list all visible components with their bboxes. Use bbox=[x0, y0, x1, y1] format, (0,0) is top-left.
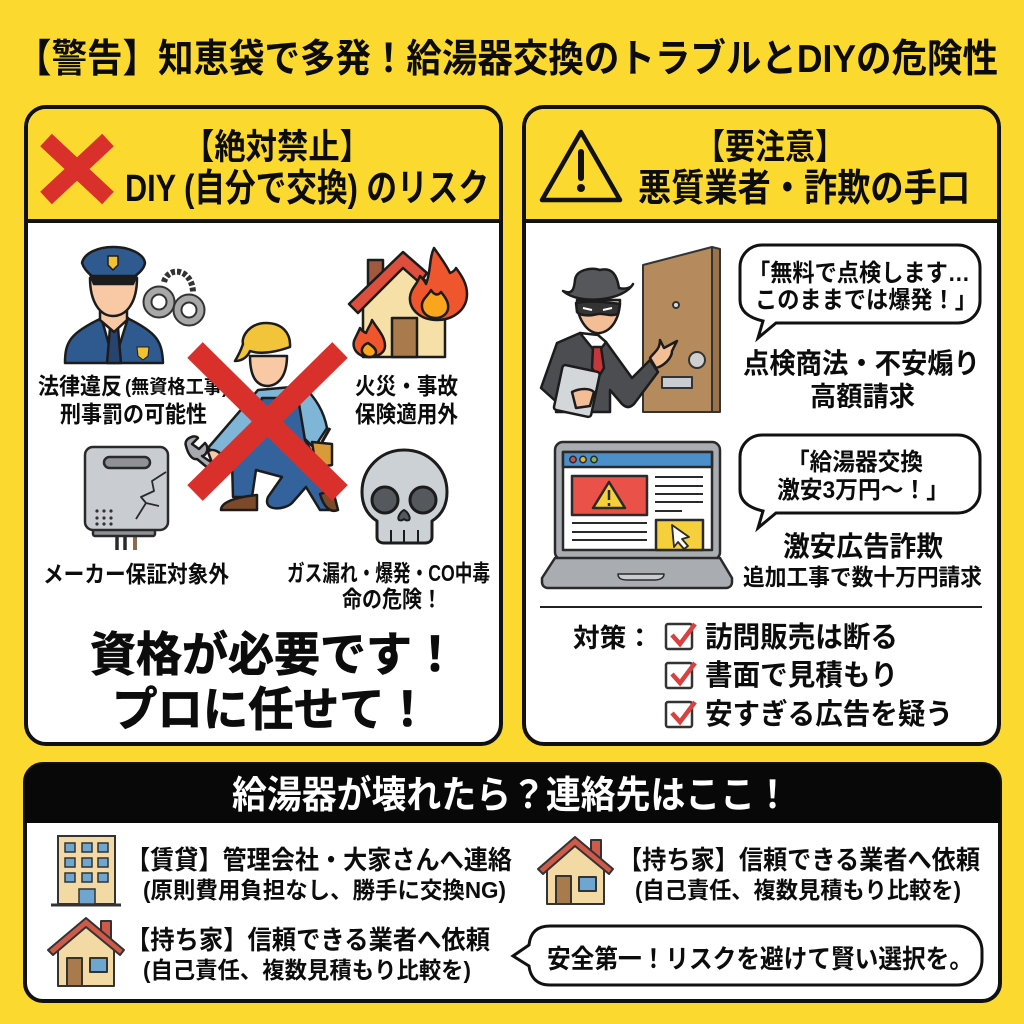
icon: cracked water heater bbox=[85, 447, 168, 550]
label: countermeasures: 対策： bbox=[573, 623, 653, 653]
text: renters: 【賃貸】管理会社・大家さんへ連絡 bbox=[126, 845, 512, 875]
icon: handcuffs bbox=[148, 272, 200, 322]
label: inspection scam bbox=[743, 348, 980, 412]
panel: DIY risks bbox=[26, 107, 501, 744]
label: gas leak danger: ガス漏れ・爆発・CO中毒 bbox=[287, 560, 490, 586]
callout: certification needed: 資格が必要です！ bbox=[90, 628, 458, 681]
label: no warranty: メーカー保証対象外 bbox=[43, 561, 229, 587]
text: homeowners left: (自己責任、複数見積もり比較を) bbox=[143, 957, 471, 983]
label: gas leak danger bbox=[287, 560, 490, 612]
speech bubble: cheap ad: 「給湯器交換 bbox=[787, 449, 923, 476]
checklist: 訪問販売は断る bbox=[705, 621, 898, 654]
label: fire and accidents: 保険適用外 bbox=[355, 401, 458, 427]
speech bubble: safety first bbox=[513, 926, 982, 985]
text: homeowners right: (自己責任、複数見積もり比較を) bbox=[635, 877, 961, 903]
icon: burning house bbox=[349, 248, 467, 357]
icon: DIY worker bbox=[186, 323, 338, 511]
icon: large red X over worker bbox=[195, 350, 340, 493]
label: legal violation bbox=[38, 373, 228, 427]
heading: caution: 【要注意】 bbox=[695, 128, 845, 167]
label: ad scam bbox=[743, 531, 982, 590]
heading: absolute prohibition: 【絶対禁止】 bbox=[183, 128, 371, 167]
panel: contacts bbox=[25, 764, 1000, 1001]
label: gas leak danger: 命の危険！ bbox=[342, 586, 442, 612]
icon: apartment building bbox=[51, 836, 121, 905]
label: legal violation: 法律違反 bbox=[38, 373, 122, 399]
text: homeowners left: 【持ち家】信頼できる業者へ依頼 bbox=[126, 925, 490, 955]
speech bubble: free inspection: 「無料で点検します… bbox=[748, 260, 970, 287]
icon: laptop ad bbox=[542, 442, 732, 588]
label: ad scam: 激安広告詐欺 bbox=[783, 531, 943, 562]
icon: police officer bbox=[65, 247, 163, 363]
text: renters: (原則費用負担なし、勝手に交換NG) bbox=[143, 877, 506, 903]
text: homeowners left bbox=[126, 925, 490, 983]
icon: house right bbox=[538, 837, 613, 904]
icon: house left bbox=[48, 918, 124, 986]
callout: certification needed bbox=[90, 628, 458, 736]
label: legal violation: 刑事罰の可能性 bbox=[60, 401, 207, 427]
checklist bbox=[666, 621, 953, 731]
icon: door bbox=[643, 247, 720, 412]
checklist: 安すぎる広告を疑う bbox=[705, 698, 953, 731]
icon: skull bbox=[362, 450, 447, 543]
speech bubble: cheap ad bbox=[740, 435, 980, 528]
label: fire and accidents bbox=[355, 373, 458, 427]
label: inspection scam: 点検商法・不安煽り bbox=[743, 348, 980, 379]
panel: scams bbox=[524, 107, 999, 744]
label: ad scam: 追加工事で数十万円請求 bbox=[743, 564, 982, 590]
icon: warning triangle bbox=[542, 132, 620, 200]
text: renters bbox=[126, 845, 512, 903]
label: legal violation: (無資格工事) bbox=[125, 376, 228, 398]
checklist: 書面で見積もり bbox=[705, 659, 898, 692]
speech bubble: cheap ad: 激安3万円～！」 bbox=[777, 477, 949, 504]
label: inspection scam: 高額請求 bbox=[810, 382, 915, 412]
speech bubble: free inspection: このままでは爆発！」 bbox=[755, 287, 977, 314]
heading: contacts: 給湯器が壊れたら？連絡先はここ！ bbox=[232, 775, 790, 817]
text: homeowners right: 【持ち家】信頼できる業者へ依頼 bbox=[618, 845, 980, 875]
icon: masked salesman bbox=[541, 269, 677, 417]
speech bubble: free inspection bbox=[740, 245, 980, 338]
speech bubble: safety first: 安全第一！リスクを避けて賢い選択を。 bbox=[547, 944, 973, 974]
heading: scam tactics: 悪質業者・詐欺の手口 bbox=[638, 168, 970, 210]
icon: red X bbox=[46, 140, 108, 198]
heading: DIY risks: DIY (自分で交換) のリスク bbox=[125, 168, 489, 210]
label: fire and accidents: 火災・事故 bbox=[355, 373, 458, 399]
callout: certification needed: プロに任せて！ bbox=[112, 683, 430, 736]
text: homeowners right bbox=[618, 845, 980, 903]
